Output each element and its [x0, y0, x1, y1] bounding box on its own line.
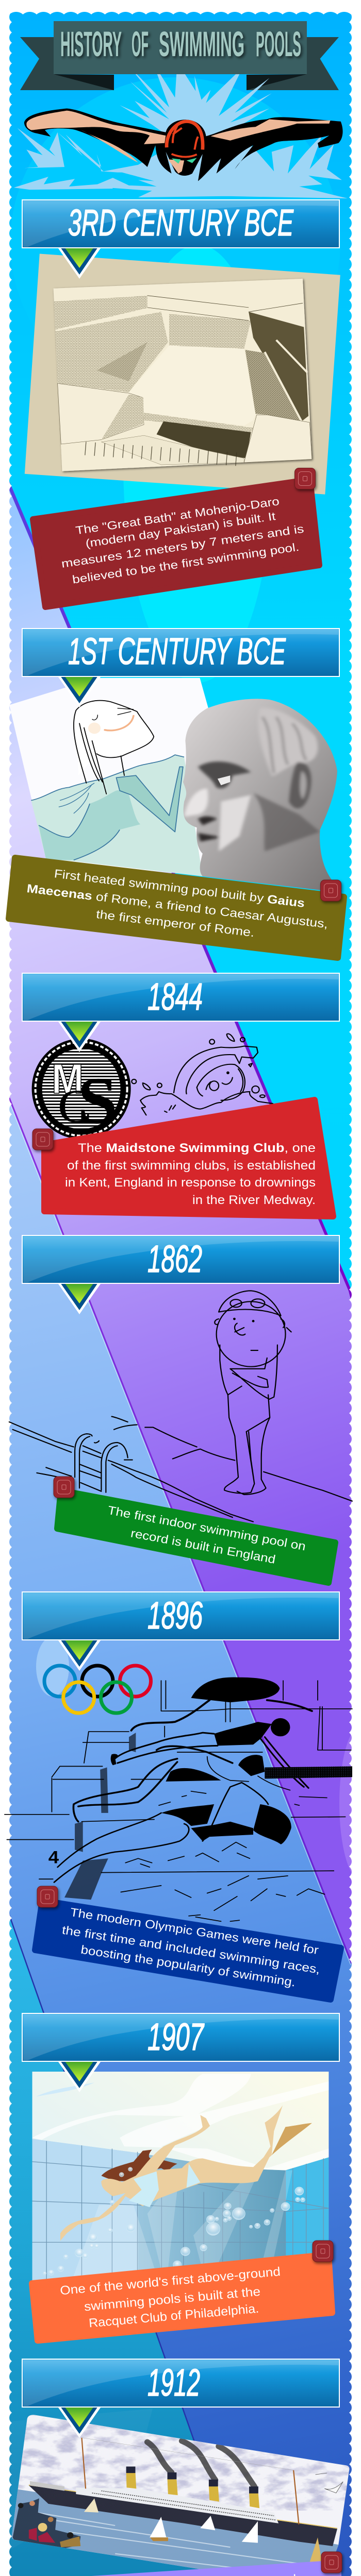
face and goggles — [168, 159, 184, 174]
banner: 1912 — [22, 2359, 339, 2438]
doodle: boy in goggles by the pool ladder — [9, 1291, 352, 1522]
callout: first indoor pool: The first indoor swimming pool on — [107, 1503, 307, 1553]
illustration: racing swimmers diving: 4 — [48, 1847, 59, 1867]
crowd — [13, 2498, 80, 2548]
title ribbon front — [54, 21, 307, 74]
image: Maidstone Swimming Club logo: C — [58, 1080, 92, 1132]
image: woman swimming underwater — [32, 2072, 329, 2289]
image: Maidstone Swimming Club logo: M — [52, 1056, 84, 1103]
title text: HISTORY — [60, 24, 122, 64]
image: woman relaxing in heated pool — [9, 678, 208, 876]
image: Maidstone Swimming Club logo — [32, 1039, 131, 1139]
callout: above-ground pool: One of the world's first above-ground — [59, 2265, 281, 2298]
pin: 1896 — [37, 1886, 58, 1907]
callout: Great Bath: measures 12 meters by 7 meters and is — [60, 522, 305, 570]
image: Maidstone Swimming Club logo: S — [77, 1064, 118, 1138]
title text: OF — [132, 24, 149, 64]
banner: 1st century BCE — [22, 629, 339, 707]
callout: Great Bath — [33, 480, 319, 607]
illustration: swimmer with splash — [14, 62, 348, 198]
doodle: cartoon swimmer — [132, 1034, 273, 1115]
banner: 1896: 1896 — [147, 1594, 203, 1637]
funnels — [126, 2472, 136, 2488]
banner: 1844: 1844 — [147, 975, 203, 1018]
callout: above-ground pool: Racquet Club of Philadelphia. — [88, 2302, 259, 2330]
title ribbon tails — [20, 37, 339, 90]
pin: 1844 — [32, 1129, 53, 1150]
callout: Maidstone Swimming Club: in Kent, England in response to drownings — [65, 1176, 316, 1190]
callout: modern Olympic Games: the first time and included swimming races, — [61, 1923, 321, 1976]
callout: Maidstone Swimming Club: in the River Medway. — [192, 1193, 316, 1207]
callout: above-ground pool: swimming pools is built at the — [84, 2285, 261, 2314]
pin: 3rd century — [295, 468, 316, 489]
image: Great Bath sketch on paper — [25, 253, 340, 495]
callout: Gaius Maecenas: the first emperor of Rome. — [95, 907, 255, 939]
splash — [17, 62, 348, 198]
callout: Maidstone Swimming Club: of the first swimming clubs, is established — [67, 1159, 316, 1173]
banner: 1907 — [22, 2013, 339, 2092]
callout: modern Olympic Games: The modern Olympic Games were held for — [69, 1905, 320, 1957]
callout: Great Bath: believed to be the first swimming pool. — [72, 540, 300, 586]
banner: 1912: 1912 — [147, 2361, 200, 2404]
illustration: racing swimmers diving — [5, 1677, 352, 1921]
image: Olympic rings — [36, 1637, 151, 1713]
banner: 1907: 1907 — [147, 2015, 205, 2058]
callout: first indoor pool — [57, 1490, 335, 1583]
cap — [167, 122, 203, 149]
banner: 3rd century BCE — [22, 200, 339, 279]
superstructure — [76, 2487, 278, 2523]
banner: 1896 — [22, 1592, 339, 1671]
callout: Gaius Maecenas: First heated swimming pool built by Gaius — [54, 867, 305, 910]
callout: Great Bath: (modern day Pakistan) is built. It — [85, 510, 276, 550]
pin: 1st century — [321, 880, 341, 901]
callout: Maidstone Swimming Club — [44, 1100, 333, 1216]
callout: Gaius Maecenas — [9, 858, 344, 958]
masts — [81, 2438, 299, 2524]
callout: RMS Adriatic — [28, 2563, 342, 2576]
sailing boats — [84, 2498, 99, 2513]
callout: above-ground pool — [32, 2255, 332, 2341]
skin highlights — [26, 111, 166, 144]
callout: Maidstone Swimming Club: The Maidstone Swimming Club , one — [78, 1141, 316, 1155]
callout: first indoor pool: record is built in England — [130, 1526, 276, 1566]
callout: modern Olympic Games — [35, 1901, 341, 1999]
pin: 1912 — [321, 2552, 342, 2573]
pin: 1907 — [313, 2241, 333, 2262]
title text: SWIMMING — [159, 24, 244, 64]
hull — [29, 2485, 337, 2546]
swimmer body — [24, 108, 343, 181]
image: ocean liner RMS Adriatic — [9, 2411, 354, 2576]
title text — [60, 24, 301, 64]
banner: 1862 — [22, 1235, 339, 1314]
smoke — [147, 2441, 254, 2486]
banner: 1844 — [22, 973, 339, 1052]
image: Roman bust of Maecenas — [183, 699, 337, 890]
callout: Great Bath: The "Great Bath" at Mohenjo-Daro — [75, 495, 280, 537]
callout: modern Olympic Games: boosting the popularity of swimming. — [80, 1943, 297, 1989]
callout: Gaius Maecenas: Maecenas of Rome, a friend to Caesar Augustus, — [26, 882, 329, 930]
pin: 1862 — [54, 1477, 74, 1498]
banner: 1862: 1862 — [147, 1238, 202, 1280]
